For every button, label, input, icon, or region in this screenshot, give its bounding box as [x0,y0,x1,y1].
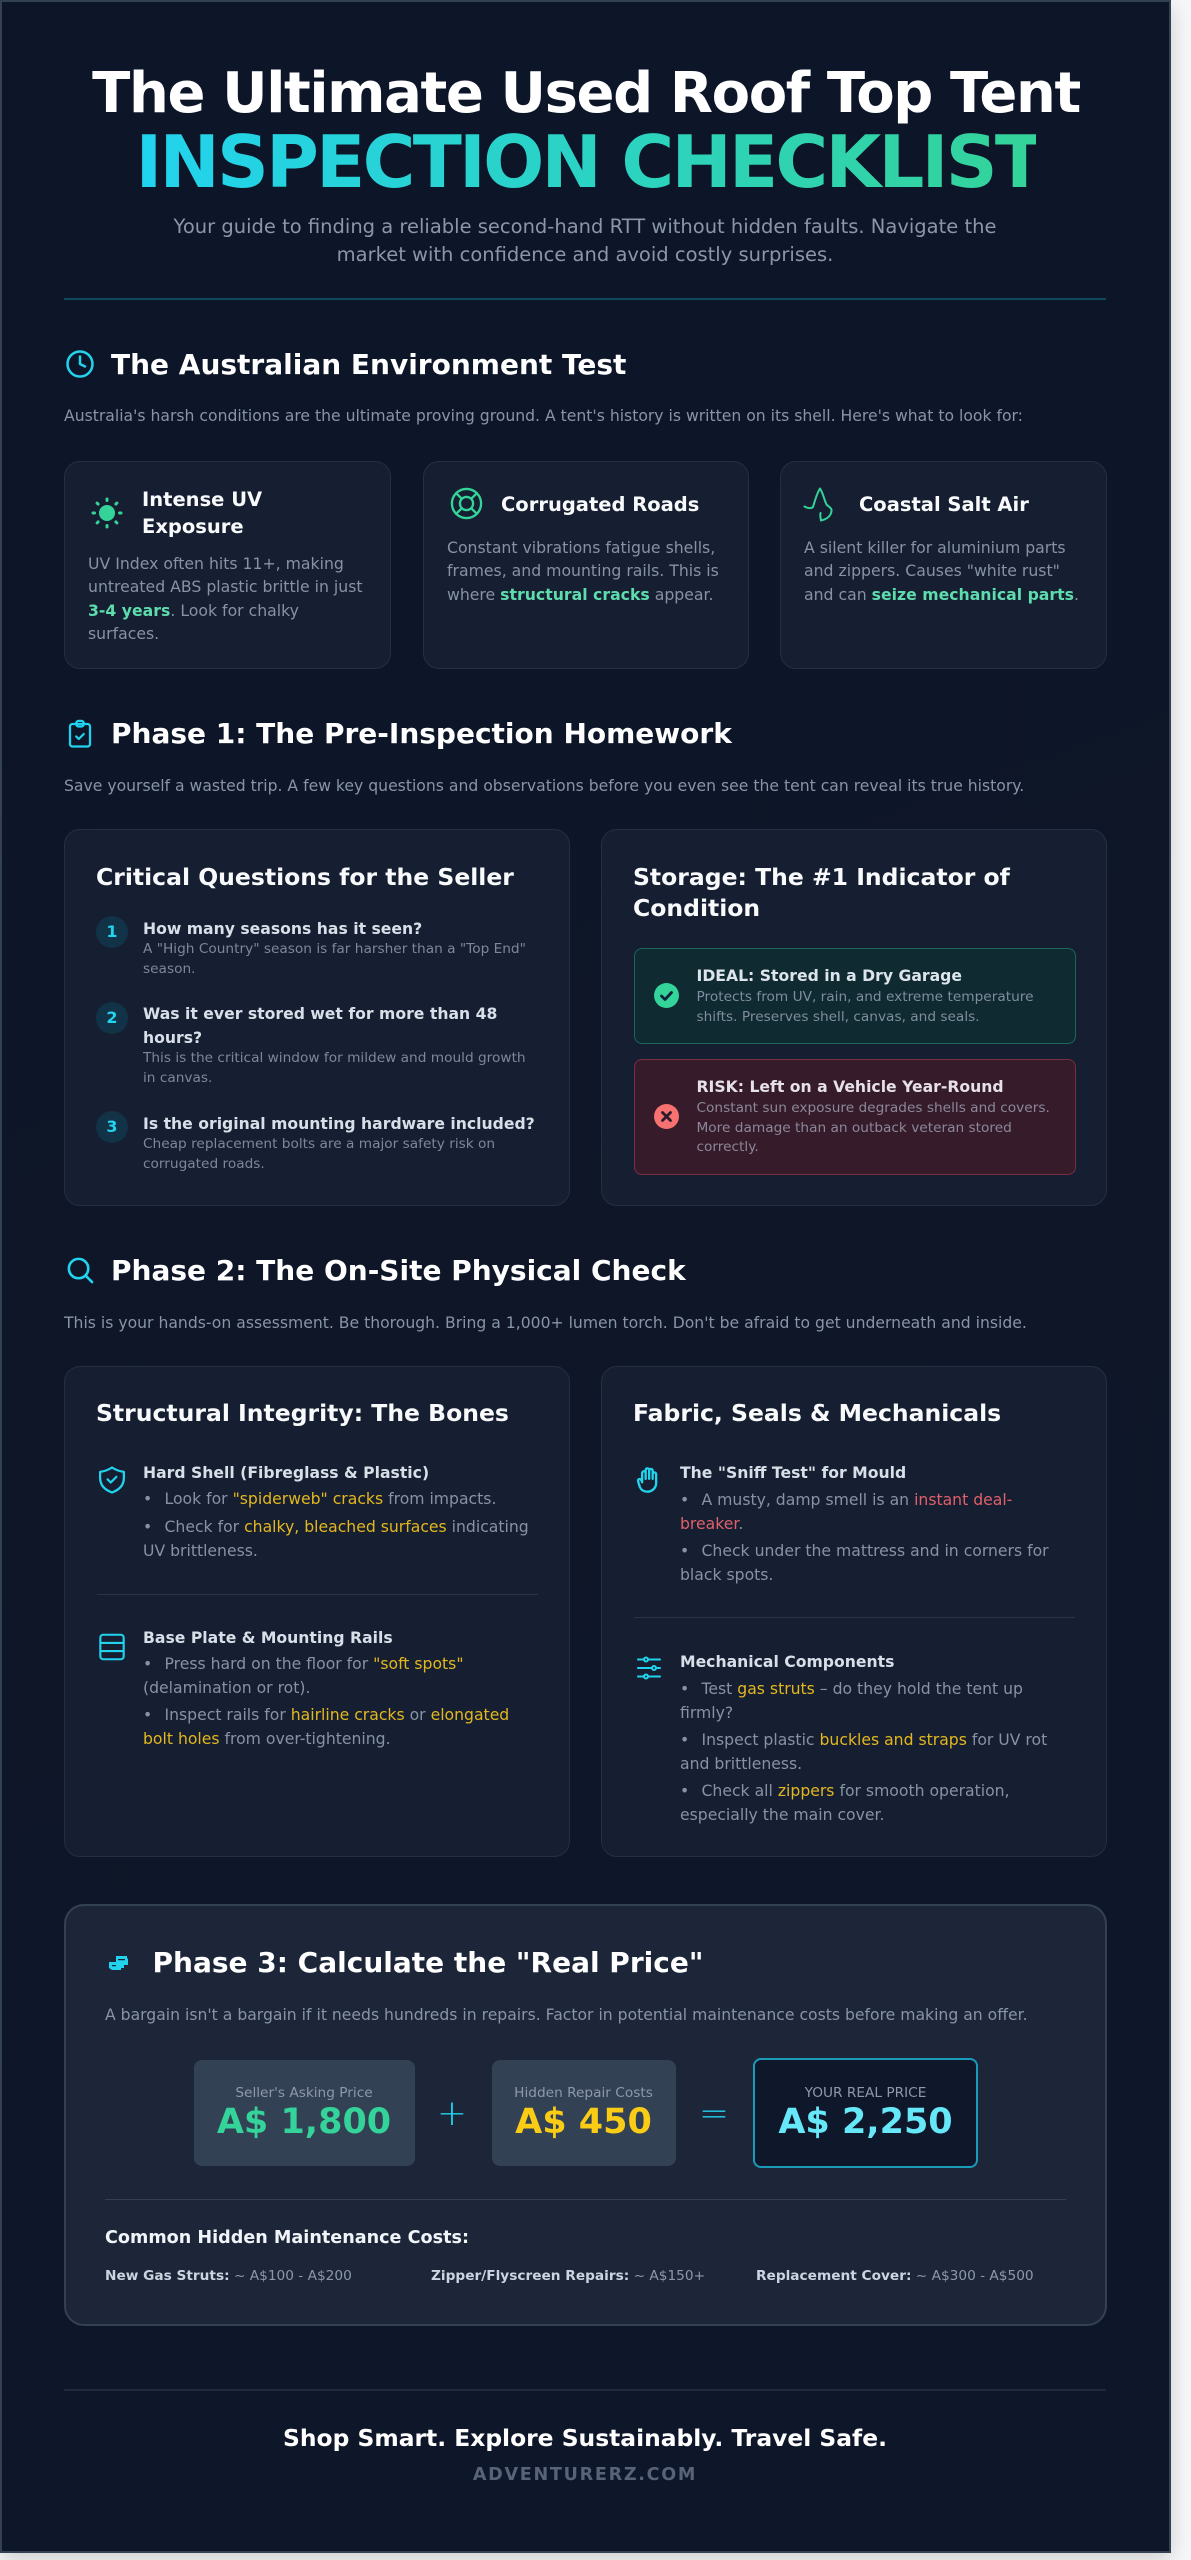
box text [696,1100,1050,1155]
panel: corrugated roads [423,461,749,669]
price value: A$ 1,800 [217,2102,391,2142]
number badge 2: 2 [106,1008,118,1027]
price value: A$ 2,250 [778,2102,953,2142]
item bullets: • [680,1679,689,1698]
cost: zipper repairs: Zipper/Flyscreen Repairs: ~ A$150+ [431,2268,705,2284]
card title: Exposure [142,515,244,538]
card text [804,538,1079,604]
panel heading: Structural Integrity: The Bones [96,1399,509,1427]
item bullets: • [680,1781,689,1800]
subtitle: market with confidence and avoid costly surprises. [337,243,833,266]
question title: Was it ever stored wet for more than 48 [143,1004,497,1023]
item bullets: especially the main cover. [680,1805,884,1824]
question 2 [96,1002,526,1086]
item bullets: Inspect plastic buckles and straps for UV rot [702,1730,1047,1749]
panel: storage [601,829,1107,1206]
card text: 3-4 years. Look for chalky [88,601,299,620]
question note: Cheap replacement bolts are a major safety risk on [143,1136,495,1152]
intro: phase 1: Save yourself a wasted trip. A few key questions and observations before you even see the tent can reveal its true history. [64,776,1024,795]
item bullets: Press hard on the floor for "soft spots" [164,1654,464,1673]
divider [634,1617,1074,1618]
cost: gas struts: New Gas Struts: ~ A$100 - A$200 [105,2268,352,2284]
question title: How many seasons has it seen? [143,919,422,938]
item bullets: A musty, damp smell is an instant deal- [702,1490,1012,1509]
divider [96,1594,538,1595]
footer divider [64,2389,1106,2391]
item bullets: Check all zippers for smooth operation, [702,1781,1010,1800]
card text [88,554,363,643]
card text: surfaces. [88,624,159,643]
icon: sliders [637,1656,661,1680]
box text: shifts. Preserves shell, canvas, and seals. [696,1009,980,1025]
question 3 [96,1111,535,1172]
question note [142,1050,526,1086]
icon: server [99,1634,125,1660]
item title: The "Sniff Test" for Mould [680,1463,906,1482]
box title: IDEAL: Stored in a Dry Garage [696,966,962,985]
item bullets: • [680,1730,689,1749]
item bullets: • [680,1541,689,1560]
item bullets [680,1679,1023,1722]
item bullets: UV brittleness. [143,1541,258,1560]
box text: Protects from UV, rain, and extreme temperature [696,989,1034,1005]
price box: real price [753,2058,978,2168]
icon: check [654,983,679,1008]
panel: coastal salt air [780,461,1107,669]
card text: UV Index often hits 11+, making [88,554,344,573]
item bullets: Test gas struts – do they hold the tent up [702,1679,1023,1698]
divider [105,2199,1066,2200]
question note: corrugated roads. [143,1156,265,1172]
question note: season. [143,961,195,977]
box text: correctly. [696,1139,759,1155]
box title: RISK: Left on a Vehicle Year-Round [696,1077,1004,1096]
card text [447,538,719,604]
price box: asking [194,2060,414,2166]
card title: Coastal Salt Air [859,493,1029,516]
item bullets: black spots. [680,1565,773,1584]
card text: Constant vibrations fatigue shells, [447,538,715,557]
footer tagline: Shop Smart. Explore Sustainably. Travel Safe. [283,2424,887,2452]
item bullets: • [143,1489,152,1508]
intro: phase 3: A bargain isn't a bargain if it needs hundreds in repairs. Factor in potential maintenance costs before making an offer. [105,2005,1028,2024]
item bullets: (delamination or rot). [143,1678,310,1697]
icon: salt droplet [804,488,832,522]
card text: frames, and mounting rails. This is [447,561,719,580]
item bullets: Inspect rails for hairline cracks or elongated [164,1705,509,1724]
card text: A silent killer for aluminium parts [804,538,1066,557]
heading: phase 1: Phase 1: The Pre-Inspection Homework [111,717,732,750]
heading: environment test: The Australian Environment Test [111,348,626,381]
number badge 1: 1 [106,922,118,941]
item bullets: firmly? [680,1703,733,1722]
number badge 3 [96,1111,128,1143]
number badge 3: 3 [106,1117,118,1136]
intro: phase 2: This is your hands-on assessment. Be thorough. Bring a 1,000+ lumen torch. Don't be afraid to get underneath and inside. [64,1313,1027,1332]
item bullets [680,1541,1049,1584]
question note [143,1136,495,1172]
footer brand: ADVENTURERZ.COM [473,2465,697,2485]
card title: Intense UV [142,488,262,510]
title: The Ultimate Used Roof Top Tent [92,61,1080,126]
item bullets: • [680,1490,689,1509]
panel heading: Fabric, Seals & Mechanicals [633,1399,1001,1427]
item bullets [143,1517,529,1560]
item bullets: breaker. [680,1514,743,1533]
panel: critical questions [64,829,570,1206]
panel heading: Condition [633,894,760,922]
panel heading: Critical Questions for the Seller [96,863,514,891]
card title: Corrugated Roads [501,493,699,516]
question title: hours? [143,1028,202,1047]
question note: in canvas. [143,1070,212,1086]
icon: sun [92,498,122,528]
price label: Hidden Repair Costs [514,2085,653,2101]
box text: Constant sun exposure degrades shells and covers. [696,1100,1050,1116]
header divider [64,298,1106,300]
item bullets: and brittleness. [680,1754,802,1773]
item title: Mechanical Components [680,1652,894,1671]
maintenance heading: Common Hidden Maintenance Costs: [105,2228,469,2248]
question note: A "High Country" season is far harsher than a "Top End" [143,941,526,957]
item bullets: • [143,1517,152,1536]
panel: phase 3 real price [64,1904,1107,2326]
item bullets [680,1490,1012,1533]
question note: This is the critical window for mildew and mould growth [143,1050,526,1066]
cost: replacement cover: Replacement Cover: ~ A$300 - A$500 [756,2268,1034,2284]
item bullets [143,1654,464,1697]
card text: where structural cracks appear. [447,585,714,604]
item bullets [680,1781,1010,1824]
risk storage box [634,1059,1076,1175]
card text: untreated ABS plastic brittle in just [88,577,363,596]
panel heading: Storage: The #1 Indicator of [633,863,1010,891]
icon: clipboard check [68,720,92,748]
panel: structural integrity [64,1366,570,1857]
item bullets: Check for chalky, bleached surfaces indicating [164,1517,529,1536]
operator: plus: + [437,2093,467,2134]
card text: and zippers. Causes "white rust" [804,561,1060,580]
intro: environment: Australia's harsh conditions are the ultimate proving ground. A tent's history is written on its shell. Here's what to look for: [64,406,1023,425]
item bullets: Look for "spiderweb" cracks from impacts. [164,1489,496,1508]
ideal storage box [634,948,1076,1044]
item bullets: bolt holes from over-tightening. [143,1729,391,1748]
item bullets: • [143,1705,152,1724]
icon: coins glyph [109,1956,128,1970]
box text [696,989,1034,1025]
icon: clock [66,350,94,378]
number badge 2 [96,1002,128,1034]
item title: Hard Shell (Fibreglass & Plastic) [143,1463,429,1482]
panel heading [633,863,1010,922]
question 1 [96,916,526,977]
icon: hand [636,1467,658,1493]
item bullets [143,1705,509,1748]
card text: and can seize mechanical parts. [804,585,1079,604]
card title [142,488,262,538]
subtitle: Your guide to finding a reliable second-hand RTT without hidden faults. Navigate the [174,215,996,238]
item bullets [680,1730,1047,1773]
icon: life ring [450,488,482,520]
heading: phase 3: Phase 3: Calculate the "Real Price" [152,1946,703,1979]
item bullets: Check under the mattress and in corners for [702,1541,1049,1560]
box text: More damage than an outback veteran stored [696,1120,1012,1136]
price value: A$ 450 [515,2102,652,2142]
question title [143,1004,497,1047]
operator: equals: = [699,2093,729,2134]
icon: magnifier [68,1258,94,1284]
price box: repair [492,2060,676,2166]
question note [143,941,526,977]
price label: YOUR REAL PRICE [805,2085,926,2101]
panel: fabric seals mechanicals [601,1366,1107,1857]
item bullets: • [143,1654,152,1673]
heading: phase 2: Phase 2: The On-Site Physical Check [111,1254,686,1287]
question title: Is the original mounting hardware included? [143,1114,535,1132]
panel: UV exposure [64,461,391,669]
icon: cross [654,1104,679,1129]
price label: Seller's Asking Price [235,2085,373,2101]
item title: Base Plate & Mounting Rails [143,1628,393,1647]
icon: shield [99,1466,125,1494]
subtitle [174,215,996,266]
title highlight: INSPECTION CHECKLIST [136,120,1041,204]
number badge 1 [96,916,128,948]
